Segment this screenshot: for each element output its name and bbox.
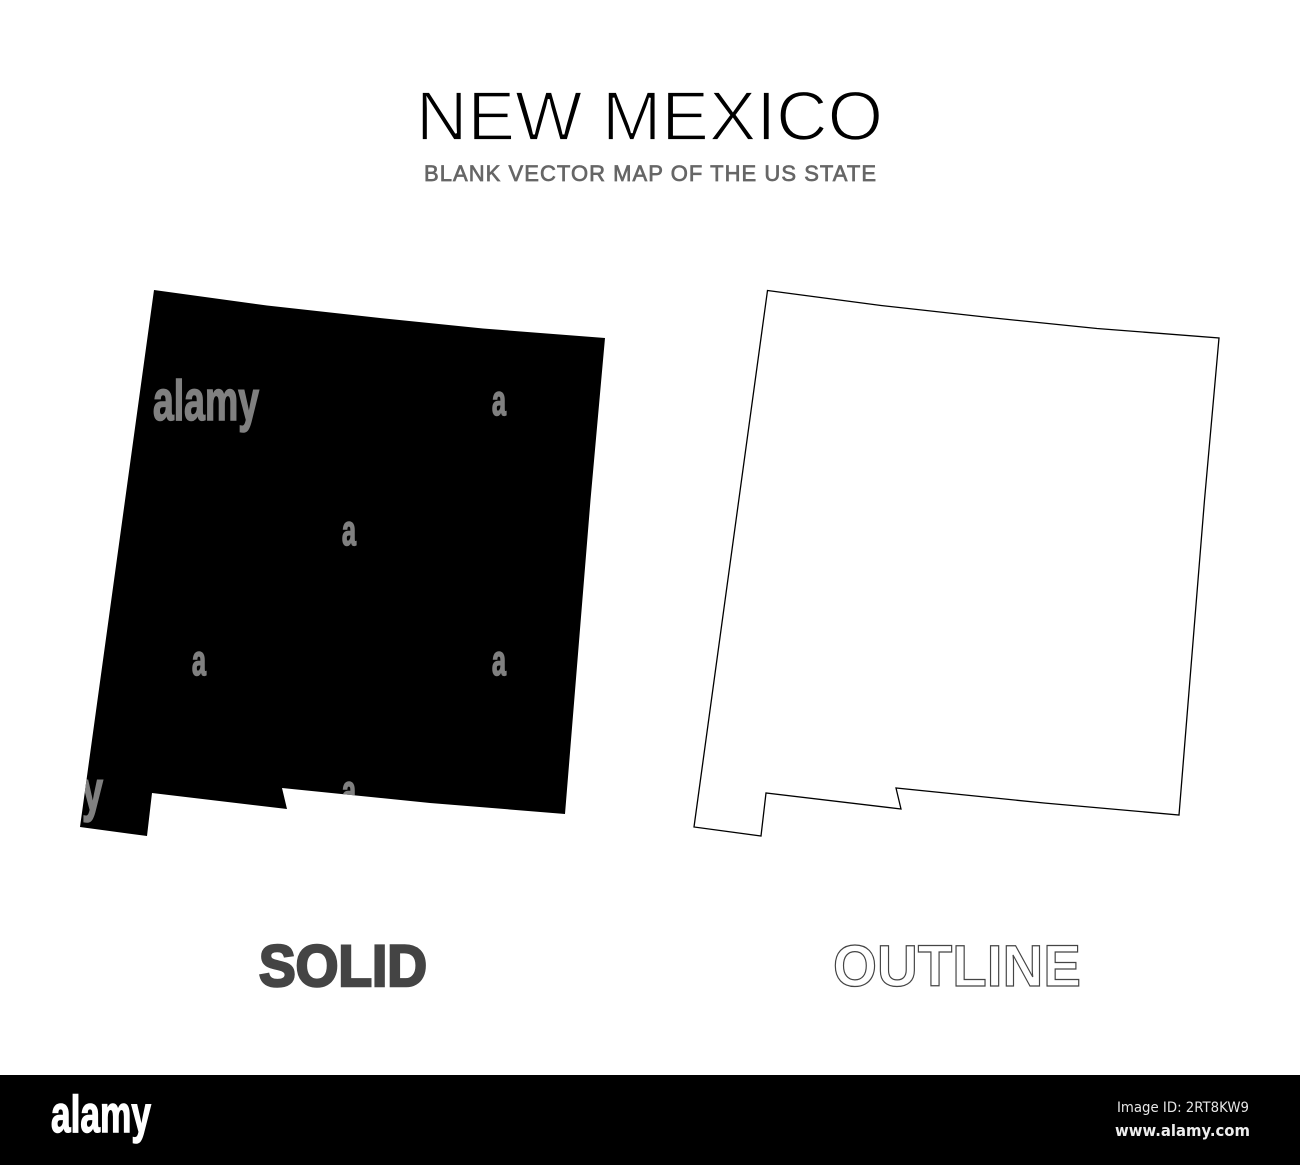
solid map of New Mexico (80, 290, 605, 836)
label: solid: SOLID (259, 934, 427, 999)
solid map of New Mexico: a (342, 767, 357, 815)
title: NEW MEXICO (416, 77, 883, 155)
website: www.alamy.com (1115, 1121, 1250, 1140)
label: outline: OUTLINE (833, 934, 1081, 999)
subtitle: BLANK VECTOR MAP OF THE US STATE (424, 161, 876, 186)
solid map of New Mexico: a (342, 507, 357, 555)
solid map of New Mexico: a (192, 637, 207, 685)
solid map of New Mexico: a (492, 377, 507, 425)
outline map of New Mexico (694, 290, 1219, 836)
solid map of New Mexico: a (492, 637, 507, 685)
solid map of New Mexico: y (82, 759, 103, 823)
solid map of New Mexico: alamy (153, 369, 259, 433)
image id: Image ID: 2RT8KW9 (1117, 1100, 1249, 1116)
footer band (0, 1075, 1300, 1165)
footer logo: alamy (51, 1086, 151, 1144)
